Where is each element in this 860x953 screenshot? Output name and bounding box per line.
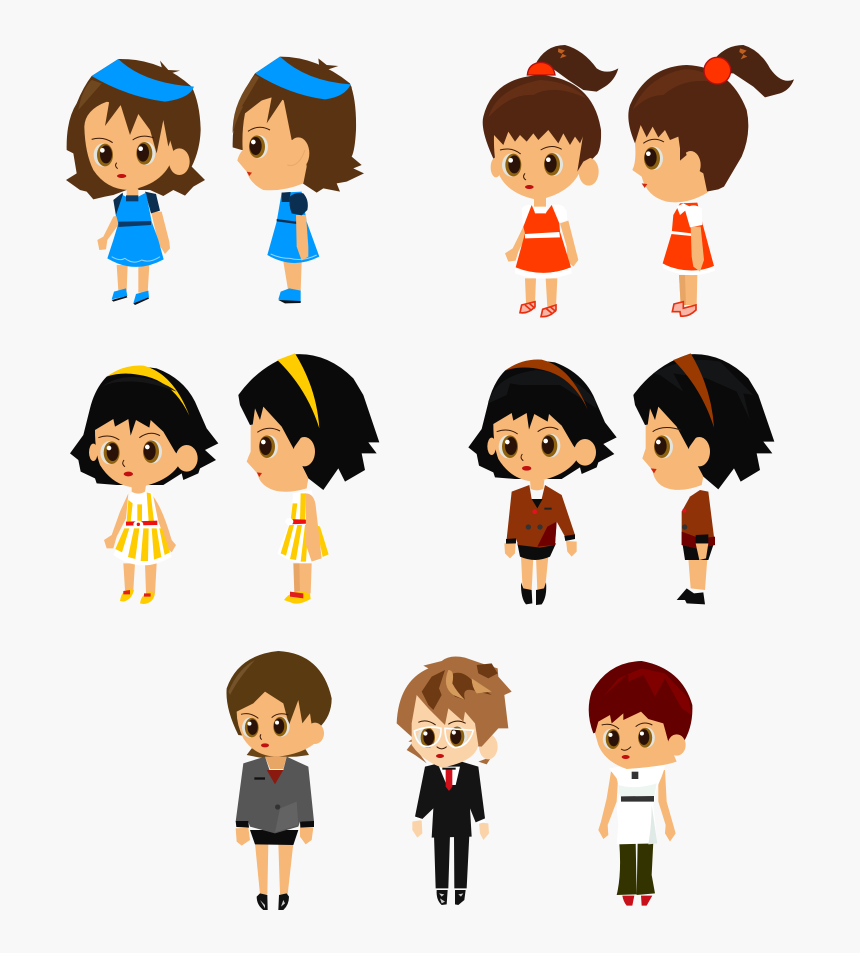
character: girl in blue dress, front view [66, 59, 205, 305]
grey suit jacket [236, 757, 314, 833]
grey suit shoes [257, 893, 289, 910]
red side shoes [672, 302, 696, 316]
brown jacket woman shoes [521, 582, 546, 605]
character: girl in blue dress, side view [233, 57, 364, 303]
blue girl legs [117, 265, 149, 293]
white top hair [589, 661, 692, 745]
yellow girl dress stripes [115, 492, 170, 561]
blue girl bangs [83, 82, 193, 155]
blue girl brows, nose and mouth [92, 136, 154, 169]
blue side ear [287, 137, 309, 169]
brown jacket woman brows, nose and mouth [497, 427, 558, 461]
brown jacket woman face [493, 413, 580, 482]
brown side ear [689, 437, 710, 466]
yellow side face [247, 407, 308, 492]
yellow girl legs [123, 563, 157, 593]
brown side brow and mouth [653, 428, 681, 432]
brown jacket woman hair [468, 361, 617, 479]
character: woman in brown jacket, side view [633, 353, 774, 604]
red girl brows, nose and mouth [500, 146, 562, 180]
yellow side arm [306, 493, 322, 562]
character: woman in grey suit [226, 651, 332, 910]
brown jacket woman hands [504, 541, 577, 558]
brown jacket woman legs [521, 557, 548, 590]
red girl shoes [520, 302, 556, 317]
white top belt [621, 796, 654, 802]
red girl neck [534, 197, 546, 207]
brown jacket woman neck [530, 480, 544, 490]
red side sleeve and arm [691, 227, 704, 272]
blue girl dress [107, 193, 164, 267]
red girl hair back [483, 75, 601, 172]
white top eyes [603, 729, 620, 749]
grey suit brows, nose and mouth [241, 714, 288, 740]
brown side shoes [677, 588, 705, 604]
brown side eye [654, 435, 673, 458]
yellow girl shoes [120, 588, 155, 604]
yellow girl arms [104, 493, 176, 552]
blue girl eyes [94, 143, 113, 167]
yellow side ear [294, 437, 315, 466]
blue girl shoes [112, 288, 149, 303]
character: woman in brown jacket, front view [468, 360, 617, 605]
brown jacket woman left ear [487, 438, 496, 455]
red girl ears [491, 157, 501, 177]
yellow side eye [259, 435, 278, 458]
black suit hands [412, 820, 489, 840]
grey suit hands [236, 828, 313, 846]
grey suit ear [306, 723, 324, 744]
red girl legs [525, 278, 557, 307]
grey suit eyes [242, 718, 259, 738]
yellow girl dress [113, 492, 172, 565]
grey suit skirt [250, 830, 298, 845]
brown jacket woman jacket [507, 485, 575, 548]
red girl dress [516, 205, 571, 273]
black suit jacket [415, 762, 485, 838]
red side eye [644, 147, 663, 170]
grey suit legs [255, 843, 293, 894]
red side dress [663, 203, 714, 272]
brown side headband [673, 353, 714, 428]
blue side shoes [278, 288, 301, 303]
yellow girl left ear [89, 444, 98, 461]
blue girl hair back [66, 59, 205, 199]
yellow girl neck [132, 485, 146, 494]
brown jacket woman ear [574, 439, 596, 466]
yellow girl belt [126, 521, 157, 526]
character: girl in red dress, side view [628, 45, 794, 316]
yellow side dress stripes [281, 493, 329, 562]
blue side legs [283, 262, 302, 292]
red girl eyes [502, 153, 521, 177]
character: man in black suit with glasses [397, 657, 512, 905]
blue girl sleeves [113, 192, 160, 216]
blue side headband [255, 57, 351, 99]
red side hair [628, 65, 748, 192]
character: girl in yellow dress, front view [70, 366, 218, 604]
red side brow and mouth [643, 139, 664, 143]
blue side hair [233, 57, 364, 193]
character: girl in yellow dress, side view [238, 353, 379, 604]
blue side sleeve and arm [296, 215, 308, 261]
blue girl face [84, 102, 174, 190]
grey suit face [237, 692, 322, 757]
brown side legs [688, 558, 707, 590]
brown jacket woman skirt [517, 543, 556, 560]
brown jacket woman headband [505, 360, 588, 410]
blue girl arms [97, 212, 170, 254]
yellow side legs [293, 563, 312, 593]
red side hair tie [704, 57, 731, 84]
black suit glasses [414, 727, 473, 748]
black suit legs [434, 835, 469, 888]
yellow side belt [287, 519, 317, 524]
red girl ponytail [535, 45, 618, 92]
blue girl ear [169, 148, 190, 175]
black suit ear [479, 734, 498, 759]
blue girl neck and collar [127, 188, 138, 197]
white top legs [617, 842, 655, 895]
grey suit hair [226, 651, 332, 745]
yellow girl headband [107, 366, 189, 416]
black suit hair tips [407, 743, 492, 764]
blue side brow and mouth [248, 127, 270, 131]
brown side face [642, 407, 703, 490]
white top collar [632, 772, 638, 779]
white top shoes [622, 896, 652, 906]
yellow side headband [277, 353, 319, 428]
red side face [632, 125, 707, 202]
yellow girl eyes [100, 441, 120, 464]
red girl arms [505, 221, 578, 267]
blue side bangs [242, 70, 352, 140]
yellow girl brows, nose and mouth [98, 433, 160, 467]
brown side jacket [682, 490, 715, 548]
blue girl headband [92, 59, 194, 102]
black suit tie [446, 769, 452, 791]
black suit hair back [397, 657, 512, 747]
white top dress [609, 765, 666, 844]
black suit brows and mouth [418, 721, 466, 749]
black suit shoes [437, 890, 466, 905]
brown side arm [696, 543, 708, 560]
black suit hair curls [422, 670, 445, 710]
blue side dress [267, 192, 319, 263]
white top brows, nose and mouth [602, 723, 652, 750]
red side ponytail [715, 45, 794, 97]
yellow girl ear [176, 445, 198, 472]
red side legs [679, 275, 697, 305]
brown side hair [633, 354, 774, 489]
white top ears [668, 734, 686, 756]
red girl hair tie [527, 62, 555, 75]
yellow side hair [238, 354, 379, 490]
yellow girl face [95, 419, 182, 488]
brown side skirt [683, 545, 713, 560]
character: girl in red dress, front view [483, 45, 618, 317]
red girl sleeves [522, 205, 567, 226]
character: woman in white top with green trousers [589, 661, 692, 906]
yellow girl hair [70, 367, 218, 485]
black suit shirt [439, 767, 460, 785]
blue side eye [249, 135, 268, 158]
grey suit hair tips [247, 748, 309, 758]
white top face [595, 712, 677, 769]
red side ear [681, 151, 701, 179]
white top arms [598, 770, 676, 842]
brown jacket woman eyes [499, 435, 518, 458]
yellow side brow and mouth [257, 428, 280, 432]
black suit eyes [418, 727, 435, 748]
yellow side shoes [284, 591, 311, 604]
blue side face [237, 97, 307, 190]
yellow side dress [277, 490, 329, 563]
black suit face [412, 695, 478, 768]
red girl face [494, 130, 584, 200]
